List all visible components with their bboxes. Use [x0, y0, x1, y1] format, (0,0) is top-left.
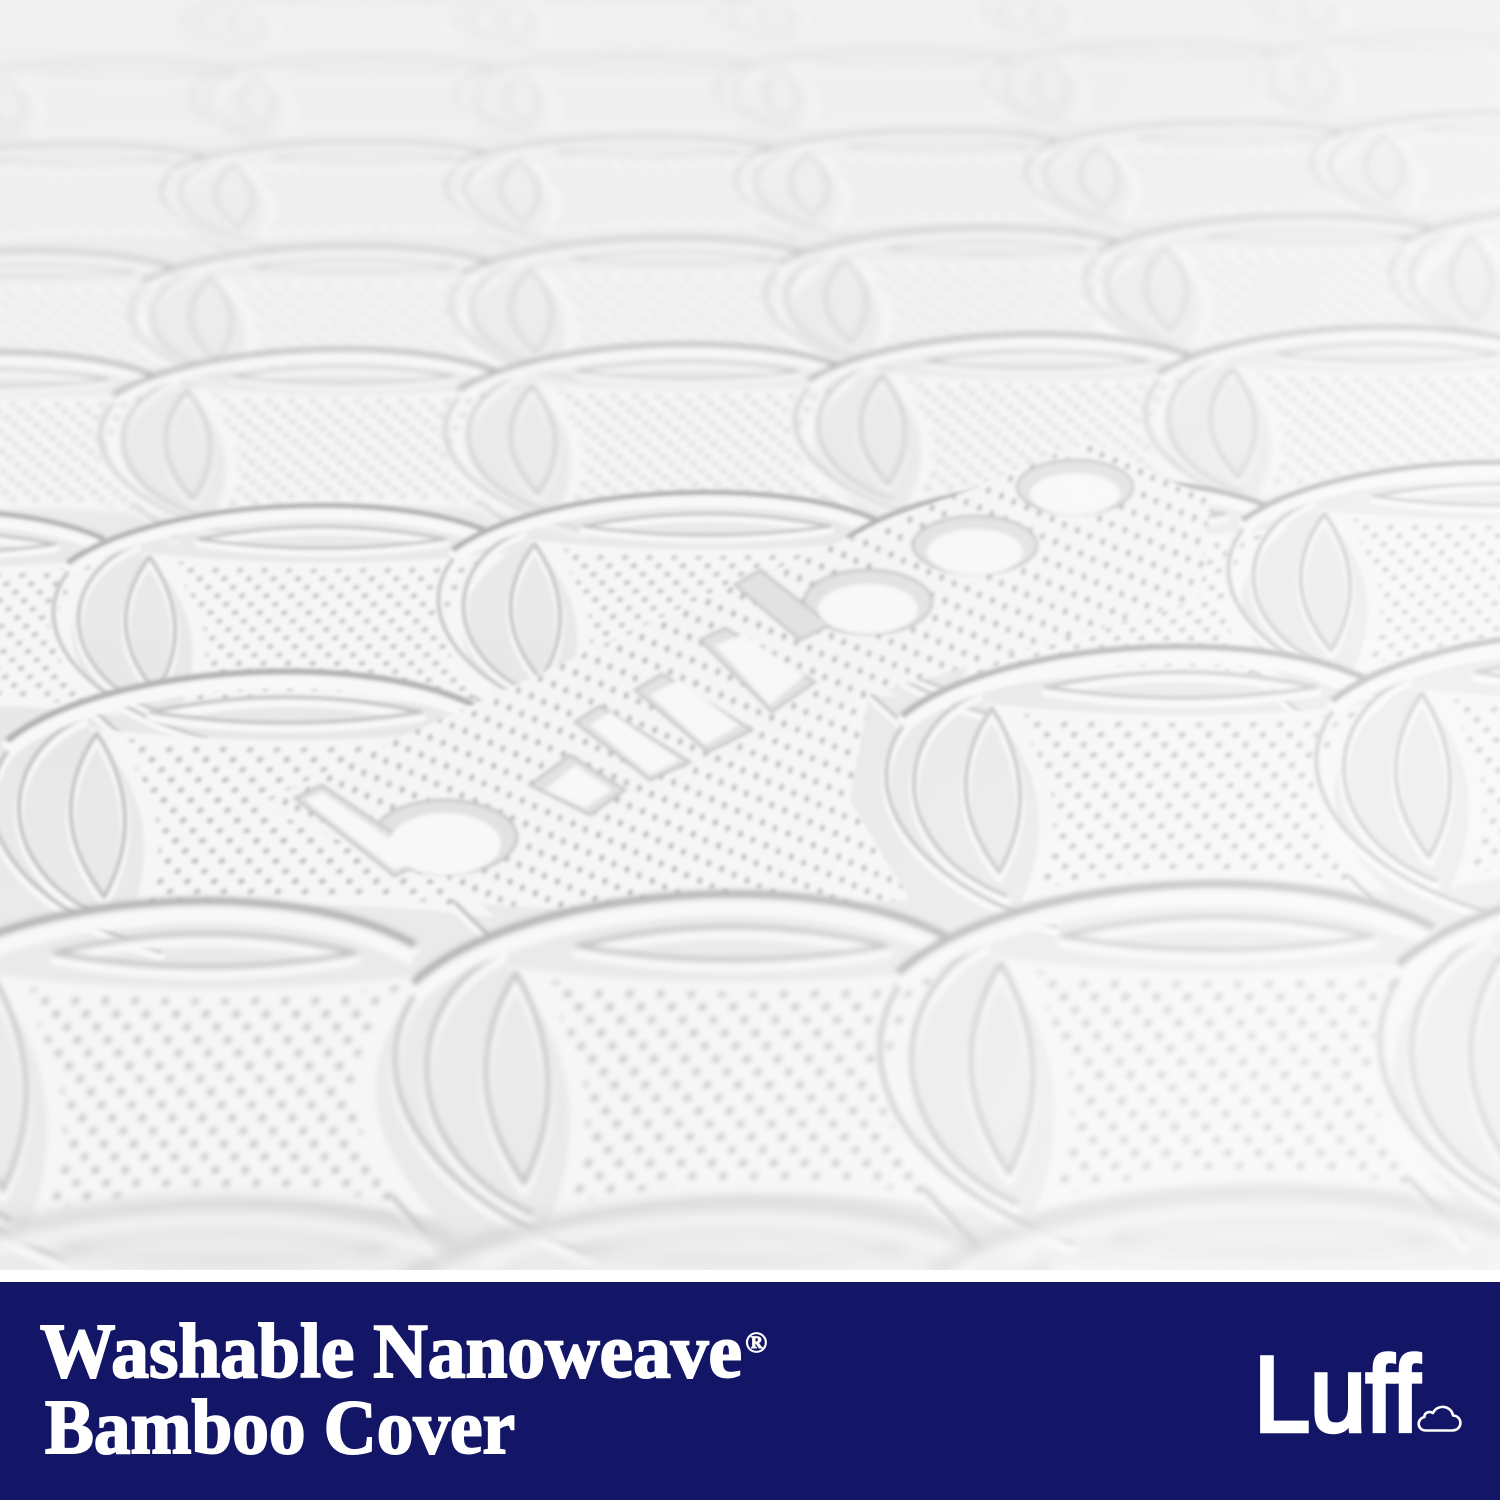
fabric motif row: nearest, out of focus	[0, 1194, 1500, 1500]
fabric motif row: front	[0, 876, 1500, 1267]
fabric motif row: far	[0, 36, 1500, 149]
logo: Luff with cloud: Luff	[1254, 1334, 1420, 1454]
fabric motif row: upper middle	[0, 206, 1500, 398]
fabric motif row: farthest, faint	[183, 0, 1500, 54]
raised dotted field below the logo band	[420, 690, 910, 915]
diagonal woven bamboo logo band	[255, 440, 1210, 895]
title: product name: Bamboo Cover	[45, 1384, 515, 1470]
icon: embossed bamboo lettering blobs	[295, 460, 1133, 876]
title: product name	[40, 1308, 767, 1470]
panel: navy caption banner	[0, 1282, 1500, 1500]
fabric motif row: centre	[0, 462, 1500, 748]
title: product name: Washable Nanoweave	[40, 1308, 742, 1394]
fabric motif row: in focus, lower centre	[0, 632, 1500, 957]
title: product name: ®	[745, 1326, 767, 1359]
fabric motif row: middle	[0, 327, 1500, 543]
fabric motif row: upper	[0, 113, 1500, 255]
icon: cloud	[1419, 1407, 1460, 1430]
